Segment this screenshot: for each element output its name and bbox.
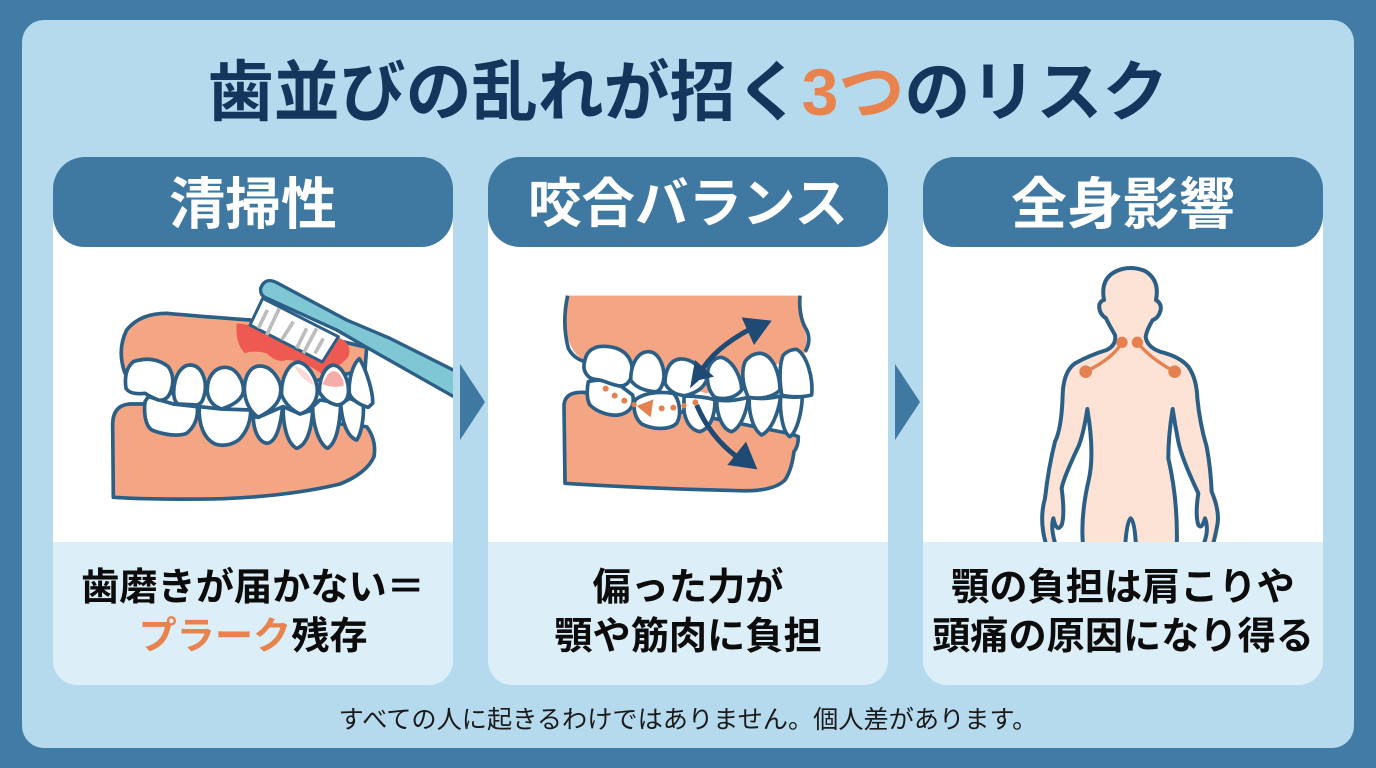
title: 歯並びの乱れが招く3つのリスク: [208, 55, 1168, 129]
text: cleaning description: [53, 542, 453, 685]
panel: cleaning: [53, 157, 453, 685]
icon: body with neck and shoulder pain: [1040, 266, 1220, 542]
text: bite description: 顎や筋肉に負担: [554, 615, 822, 658]
note: すべての人に起きるわけではありません。個人差があります。: [339, 706, 1037, 734]
heading: bite balance: [488, 157, 888, 247]
arrow: second to third: [895, 364, 920, 440]
text: cleaning description: プラーク残存: [138, 615, 368, 658]
icon: teeth and toothbrush: [110, 279, 453, 501]
heading: whole body: 全身影響: [1011, 173, 1235, 236]
heading: cleaning: [53, 157, 453, 247]
text: whole body description: 頭痛の原因になり得る: [932, 615, 1314, 658]
heading: cleaning: 清掃性: [169, 173, 337, 236]
text: bite description: 偏った力が: [593, 566, 783, 609]
text: whole body description: [923, 542, 1323, 685]
icon: misaligned bite: [562, 295, 814, 493]
text: bite description: [488, 542, 888, 685]
arrow: first to second: [460, 364, 485, 440]
panel: whole body: [923, 157, 1323, 685]
text: whole body description: 顎の負担は肩こりや: [951, 566, 1295, 609]
text: cleaning description: 歯磨きが届かない＝: [81, 566, 425, 609]
panel: bite balance: [488, 157, 888, 685]
heading: bite balance: 咬合バランス: [528, 175, 848, 234]
heading: whole body: [923, 157, 1323, 247]
